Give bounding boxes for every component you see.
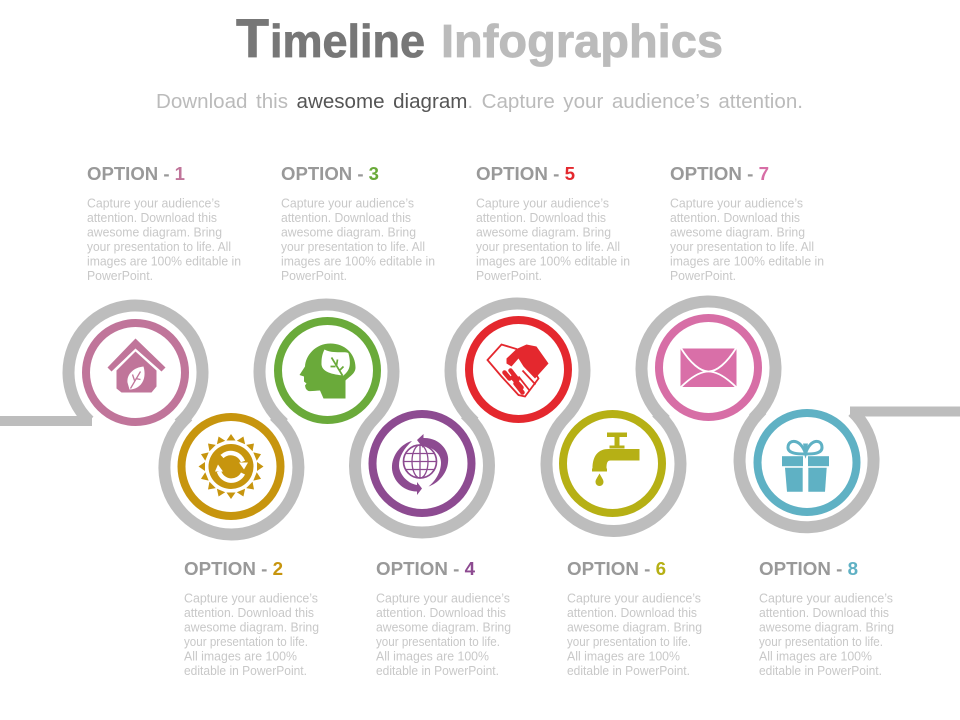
option 1 text: attention. Download this bbox=[87, 210, 217, 225]
option 2 text: Capture your audience’s bbox=[184, 590, 318, 606]
option 4 node bbox=[372, 414, 472, 513]
option 3 text bbox=[281, 163, 435, 283]
option 6 text: awesome diagram. Bring bbox=[567, 620, 702, 634]
option 4 text: your presentation to life. bbox=[376, 634, 500, 649]
option 7 text: attention. Download this bbox=[670, 210, 800, 225]
option 2 text: All images are 100% bbox=[184, 648, 297, 664]
option 3 text: attention. Download this bbox=[281, 210, 411, 225]
title bbox=[236, 7, 723, 69]
option 4 text: attention. Download this bbox=[376, 605, 506, 620]
option 3 node bbox=[278, 321, 377, 420]
title: Infographics bbox=[441, 15, 723, 67]
option 2 text bbox=[184, 558, 319, 678]
option 8 text bbox=[759, 558, 894, 678]
option 5 text: images are 100% editable in bbox=[476, 254, 630, 268]
option 2 text: editable in PowerPoint. bbox=[184, 663, 307, 678]
icon: envelope bbox=[680, 348, 736, 388]
option 5 node bbox=[469, 320, 568, 419]
option 1 text: your presentation to life. All bbox=[87, 239, 231, 254]
option 1 text: images are 100% editable in bbox=[87, 254, 241, 268]
option 2 node bbox=[182, 417, 280, 516]
option 3 text: awesome diagram. Bring bbox=[281, 224, 416, 240]
option 3 text: OPTION - 3 bbox=[281, 163, 379, 184]
option 4 text: Capture your audience’s bbox=[376, 590, 510, 606]
option 6 text: Capture your audience’s bbox=[567, 590, 701, 606]
icon: head with leaf bbox=[300, 344, 356, 398]
option 7 text bbox=[670, 163, 824, 283]
option 8 text: attention. Download this bbox=[759, 605, 889, 620]
subtitle: Download this awesome diagram. Capture your audience’s attention. bbox=[156, 91, 803, 113]
option 1 text bbox=[87, 163, 241, 283]
option 2 text: OPTION - 2 bbox=[184, 558, 283, 579]
option 8 text: Capture your audience’s bbox=[759, 590, 893, 606]
icon: gift box bbox=[782, 441, 829, 492]
option 1 text: awesome diagram. Bring bbox=[87, 224, 222, 240]
option 8 text: awesome diagram. Bring bbox=[759, 620, 894, 634]
option 6 node bbox=[563, 414, 662, 513]
option 1 text: Capture your audience’s bbox=[87, 196, 220, 210]
option 6 text: editable in PowerPoint. bbox=[567, 663, 690, 678]
option 6 text: All images are 100% bbox=[567, 648, 680, 664]
option 7 text: PowerPoint. bbox=[670, 268, 736, 283]
icon: sun with arrows bbox=[198, 434, 264, 499]
option 5 text: Capture your audience’s bbox=[476, 196, 609, 210]
option 8 node bbox=[758, 413, 856, 512]
option 5 text bbox=[476, 163, 630, 283]
option 2 text: awesome diagram. Bring bbox=[184, 620, 319, 634]
option 1 text: OPTION - 1 bbox=[87, 163, 185, 184]
option 7 text: images are 100% editable in bbox=[670, 254, 824, 268]
option 5 text: awesome diagram. Bring bbox=[476, 224, 611, 240]
option 1 text: PowerPoint. bbox=[87, 268, 153, 283]
option 4 text: editable in PowerPoint. bbox=[376, 663, 499, 678]
option 5 text: PowerPoint. bbox=[476, 268, 542, 283]
option 4 text: OPTION - 4 bbox=[376, 558, 476, 579]
option 6 text bbox=[567, 558, 702, 678]
option 8 text: your presentation to life. bbox=[759, 634, 883, 649]
option 5 text: OPTION - 5 bbox=[476, 163, 575, 184]
option 8 text: OPTION - 8 bbox=[759, 558, 858, 579]
option 7 text: your presentation to life. All bbox=[670, 239, 814, 254]
option 4 text: All images are 100% bbox=[376, 648, 489, 664]
option 6 text: OPTION - 6 bbox=[567, 558, 666, 579]
option 1 node bbox=[86, 323, 185, 422]
option 6 text: attention. Download this bbox=[567, 605, 697, 620]
icon: water tap bbox=[592, 432, 640, 486]
title: T bbox=[236, 7, 269, 69]
option 3 text: Capture your audience’s bbox=[281, 196, 414, 210]
option 3 text: images are 100% editable in bbox=[281, 254, 435, 268]
icon: eco house bbox=[108, 338, 166, 392]
option 7 node bbox=[659, 318, 758, 417]
option 6 text: your presentation to life. bbox=[567, 634, 691, 649]
option 2 text: your presentation to life. bbox=[184, 634, 308, 649]
option 5 text: attention. Download this bbox=[476, 210, 606, 225]
option 8 text: editable in PowerPoint. bbox=[759, 663, 882, 678]
option 2 text: attention. Download this bbox=[184, 605, 314, 620]
option 7 text: Capture your audience’s bbox=[670, 196, 803, 210]
option 7 text: awesome diagram. Bring bbox=[670, 224, 805, 240]
option 4 text bbox=[376, 558, 511, 678]
option 5 text: your presentation to life. All bbox=[476, 239, 620, 254]
icon: handshake bbox=[488, 344, 548, 396]
title: imeline bbox=[270, 15, 425, 67]
option 4 text: awesome diagram. Bring bbox=[376, 620, 511, 634]
timeline track bbox=[0, 301, 960, 534]
option 3 text: PowerPoint. bbox=[281, 268, 347, 283]
option 7 text: OPTION - 7 bbox=[670, 163, 769, 184]
option 3 text: your presentation to life. All bbox=[281, 239, 425, 254]
option 8 text: All images are 100% bbox=[759, 648, 872, 664]
icon: globe with arrows bbox=[392, 434, 448, 495]
